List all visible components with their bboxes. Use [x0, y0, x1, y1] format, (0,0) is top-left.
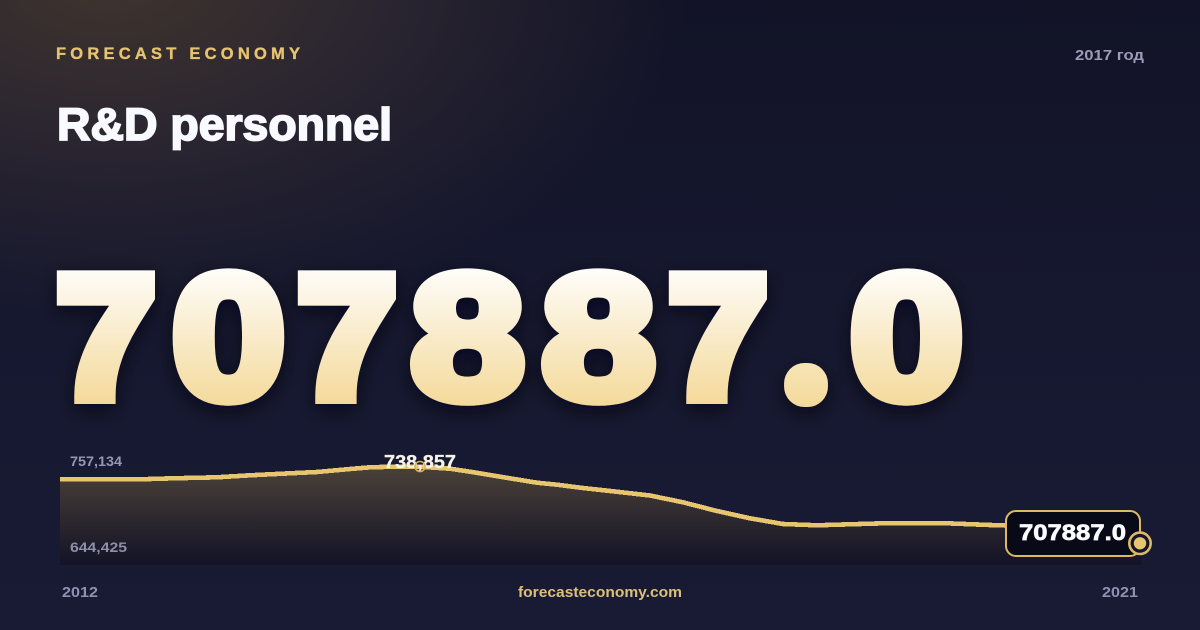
- start year: 2012: [62, 584, 98, 601]
- title: R&D personnel: [57, 99, 392, 150]
- big value: 8: [410, 237, 525, 436]
- big value: 0: [172, 237, 286, 436]
- peak value label: 738,857: [384, 452, 456, 472]
- peak marker: [415, 462, 425, 472]
- chart area fill: [60, 467, 1141, 565]
- brand label: FORECAST ECONOMY: [56, 45, 300, 63]
- big value: 7: [670, 242, 767, 433]
- minimum axis label: 644,425: [70, 539, 127, 555]
- maximum axis label: 757,134: [70, 454, 123, 469]
- area chart: [60, 452, 1151, 565]
- chart line: [60, 467, 1006, 526]
- current value tag: 707887.0: [1019, 520, 1126, 545]
- big value: 7: [298, 242, 396, 433]
- big value: 8: [541, 237, 656, 436]
- big value: 7: [58, 242, 155, 433]
- big value: 0: [850, 237, 964, 436]
- source website: forecasteconomy.com: [518, 584, 682, 601]
- big value: [58, 237, 964, 436]
- current value marker: [1129, 533, 1151, 554]
- end year: 2021: [1102, 584, 1138, 601]
- big value: .: [803, 370, 809, 392]
- current value tag: [1006, 511, 1140, 556]
- year label: 2017 год: [1075, 47, 1145, 64]
